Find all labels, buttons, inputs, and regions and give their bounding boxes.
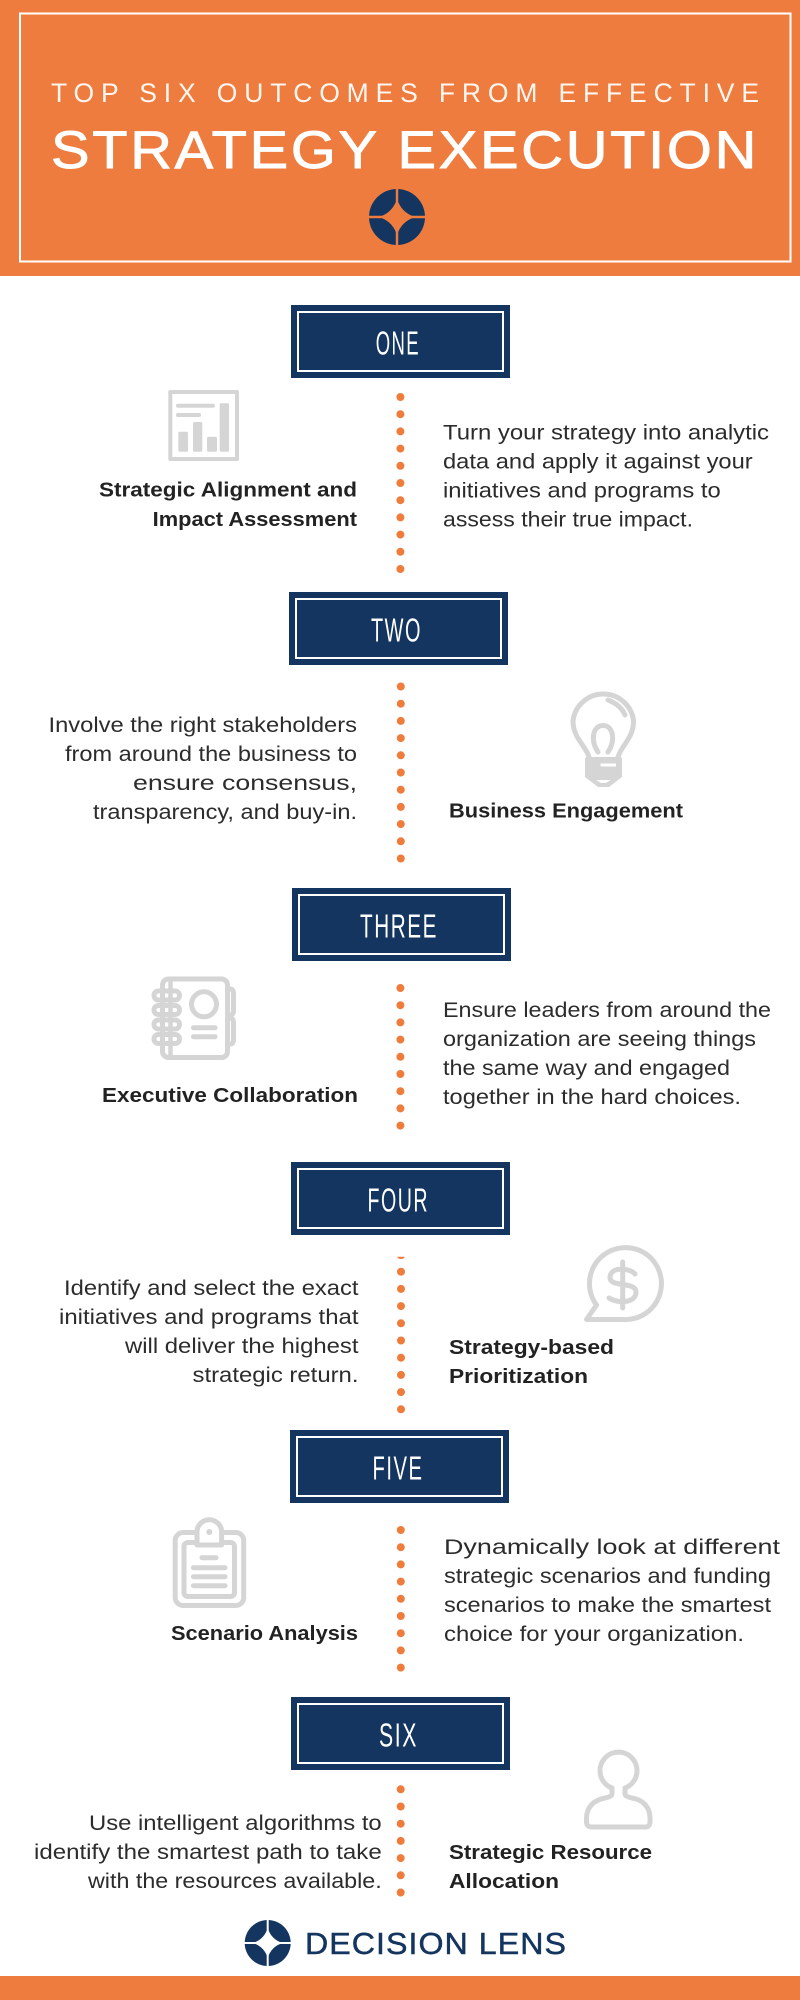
text: description five [444, 1536, 780, 1646]
text: description two [48, 714, 357, 824]
text: description five: Dynamically look at different [444, 1536, 780, 1559]
heading: strategic resource allocation: Allocation [449, 1870, 559, 1893]
dotted connector [397, 686, 405, 860]
text: description three: Ensure leaders from around the [443, 999, 771, 1022]
text: description six: with the resources available. [87, 1870, 382, 1893]
icon: header logo mark [368, 188, 426, 246]
text: description one: Turn your strategy into analytic [443, 421, 769, 444]
panel: outcome two [48, 592, 683, 860]
text: description four [59, 1277, 359, 1387]
brand name: DECISION LENS [305, 1926, 567, 1961]
text: description six: identify the smartest path to take [34, 1841, 382, 1864]
icon: person [586, 1752, 650, 1827]
heading: scenario analysis: Scenario Analysis [171, 1622, 358, 1645]
icon: dollar speech bubble [586, 1248, 661, 1320]
text: description two: from around the business to [65, 743, 357, 766]
text: description four: initiatives and programs that [59, 1306, 359, 1329]
panel: outcome three [102, 888, 771, 1126]
heading: strategic resource allocation: Strategic Resource [449, 1841, 652, 1864]
heading: strategy-based prioritization: Prioritization [449, 1365, 588, 1388]
footer bar [0, 1976, 800, 2000]
text: description two: ensure consensus, [133, 772, 357, 795]
badge: TWO [289, 592, 508, 665]
heading: strategy-based prioritization: Strategy-based [449, 1336, 614, 1359]
badge: TWO: TWO [371, 611, 422, 648]
panel: outcome five [171, 1430, 780, 1668]
header banner [0, 0, 800, 276]
text: description four: Identify and select the exact [64, 1277, 359, 1300]
badge: SIX: SIX [379, 1716, 418, 1753]
heading: executive collaboration: Executive Collaboration [102, 1084, 358, 1107]
title: main heading: STRATEGY EXECUTION [51, 121, 759, 180]
icon: clipboard [175, 1520, 244, 1606]
icon: light bulb [573, 694, 634, 787]
badge: FIVE [290, 1430, 509, 1503]
text: description three [443, 999, 771, 1109]
heading: strategic resource allocation [449, 1841, 652, 1893]
badge: FOUR: FOUR [368, 1181, 429, 1218]
text: description six [34, 1812, 382, 1893]
text: description two: Involve the right stakeholders [48, 714, 357, 737]
text: description two: transparency, and buy-in. [93, 801, 357, 824]
text: description one: assess their true impact. [443, 509, 693, 532]
badge: THREE: THREE [360, 907, 438, 944]
heading: strategic alignment [99, 479, 357, 531]
text: description six: Use intelligent algorithms to [89, 1812, 382, 1835]
text: description five: strategic scenarios and funding [444, 1565, 771, 1588]
text: description three: organization are seeing things [443, 1028, 756, 1051]
text: description four: will deliver the highest [124, 1335, 359, 1358]
badge: THREE [292, 888, 511, 961]
text: description one: initiatives and programs to [443, 480, 721, 502]
footer logo [244, 1919, 567, 1967]
text: description three: the same way and engaged [443, 1057, 730, 1080]
text: description one: data and apply it against your [443, 450, 753, 473]
panel: outcome one [99, 305, 769, 570]
title: eyebrow: TOP SIX OUTCOMES FROM EFFECTIVE [51, 78, 759, 108]
badge: ONE [291, 305, 510, 378]
badge: ONE: ONE [376, 324, 420, 361]
icon: bar chart report [170, 392, 237, 459]
panel: outcome four [59, 1162, 661, 1410]
dotted connector [396, 988, 404, 1126]
text: description five: choice for your organization. [444, 1623, 744, 1646]
text: description five: scenarios to make the smartest [444, 1594, 771, 1617]
dotted connector [396, 397, 404, 570]
heading: strategic alignment: Strategic Alignment and [99, 479, 357, 502]
icon: spiral notebook [154, 979, 234, 1058]
text: description four: strategic return. [192, 1364, 358, 1387]
dotted connector [397, 1789, 405, 1893]
panel: outcome six [34, 1697, 652, 1893]
badge: FIVE: FIVE [372, 1449, 424, 1486]
icon: footer logo mark [244, 1919, 292, 1967]
dotted connector [397, 1530, 405, 1668]
text: description three: together in the hard choices. [443, 1086, 741, 1109]
heading: strategic alignment: Impact Assessment [153, 508, 357, 531]
badge: FOUR [291, 1162, 510, 1235]
badge: SIX [291, 1697, 510, 1770]
dotted connector [397, 1257, 405, 1410]
heading: business engagement: Business Engagement [449, 800, 683, 822]
text: description one [443, 421, 769, 532]
heading: strategy-based prioritization [449, 1336, 614, 1388]
